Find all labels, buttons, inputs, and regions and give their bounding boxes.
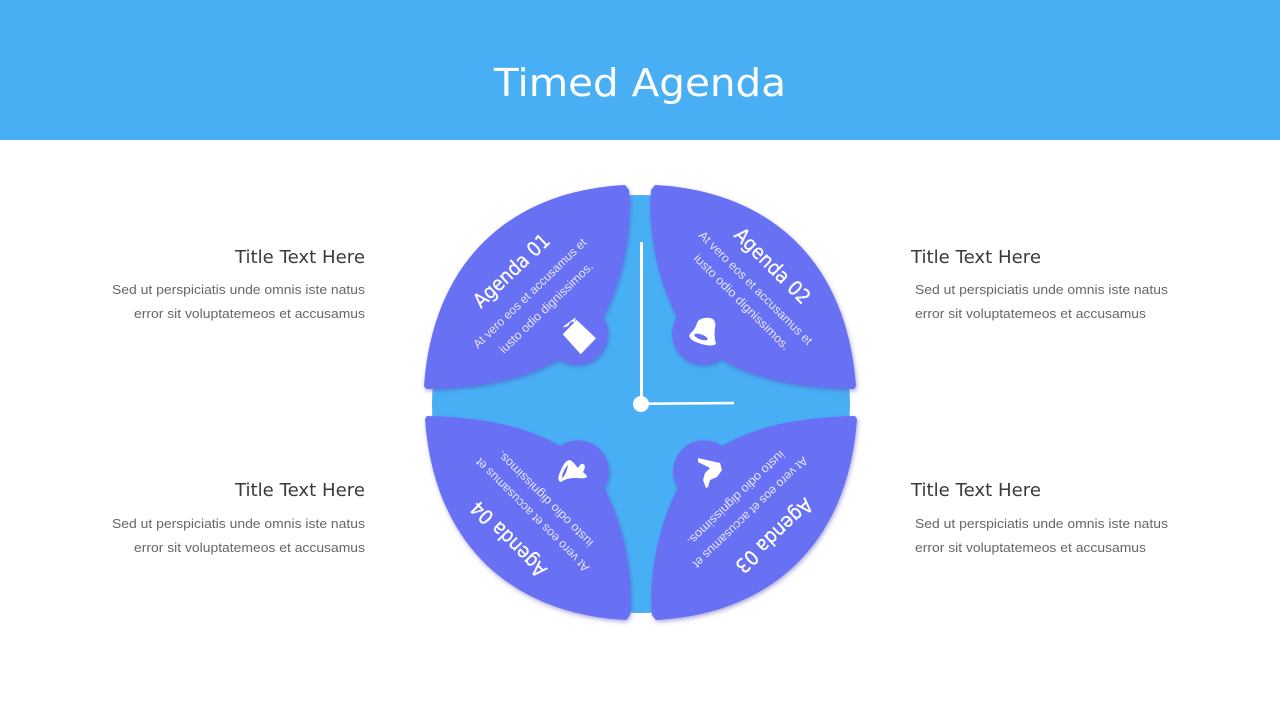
right text block: top: Sed ut perspiciatis unde omnis iste natus bbox=[915, 282, 1169, 297]
icon: megaphone bbox=[558, 460, 587, 482]
agenda 03 heading: Agenda 03 bbox=[730, 493, 818, 578]
agenda 02 description: At vero eos et accusamus et bbox=[696, 228, 816, 348]
right text block: bottom bbox=[910, 480, 1169, 555]
agenda 03 description: At vero eos et accusamus et bbox=[690, 454, 811, 571]
left text block: bottom bbox=[112, 480, 366, 555]
agenda 02 heading: Agenda 02 bbox=[729, 223, 816, 309]
clock face bbox=[432, 195, 850, 613]
panel: agenda 01 bbox=[424, 185, 630, 389]
icon: boot bbox=[698, 458, 722, 488]
left text block: bottom: Sed ut perspiciatis unde omnis iste natus bbox=[112, 516, 366, 531]
agenda 01 description: At vero eos et accusamus et bbox=[470, 235, 590, 351]
agenda 01 description: iusto odio dignissimos. bbox=[496, 259, 596, 356]
left text block: top: Sed ut perspiciatis unde omnis iste natus bbox=[112, 282, 366, 297]
icon: clipboard bbox=[563, 318, 596, 354]
agenda 01 heading: Agenda 01 bbox=[468, 228, 555, 313]
right text block: top bbox=[910, 247, 1169, 321]
agenda 03 description: iusto odio dignissimos. bbox=[684, 448, 788, 548]
icon: bell bbox=[689, 318, 716, 345]
right text block: top: Title Text Here bbox=[910, 247, 1041, 268]
panel: agenda 04 bbox=[425, 416, 631, 620]
panel: agenda 03 bbox=[651, 416, 857, 620]
right text block: bottom: Title Text Here bbox=[910, 480, 1041, 501]
right text block: bottom: error sit voluptatemeos et accusamus bbox=[915, 540, 1147, 555]
agenda 04 description: At vero eos et accusamus et bbox=[472, 455, 592, 575]
agenda 02 description: iusto odio dignissimos. bbox=[691, 251, 793, 353]
left text block: top: Title Text Here bbox=[234, 247, 365, 268]
left text block: bottom: Title Text Here bbox=[234, 480, 365, 501]
right text block: top: error sit voluptatemeos et accusamus bbox=[915, 306, 1147, 321]
agenda 04 description: iusto odio dignissimos. bbox=[494, 448, 596, 550]
left text block: top bbox=[112, 247, 366, 321]
panel: agenda 02 bbox=[650, 185, 856, 389]
left text block: bottom: error sit voluptatemeos et accusamus bbox=[134, 540, 366, 555]
left text block: top: error sit voluptatemeos et accusamus bbox=[134, 306, 366, 321]
title: Timed Agenda bbox=[493, 61, 786, 105]
clock hands bbox=[633, 242, 734, 412]
agenda 04 heading: Agenda 04 bbox=[465, 496, 552, 582]
header band bbox=[0, 0, 1280, 140]
right text block: bottom: Sed ut perspiciatis unde omnis iste natus bbox=[915, 516, 1169, 531]
